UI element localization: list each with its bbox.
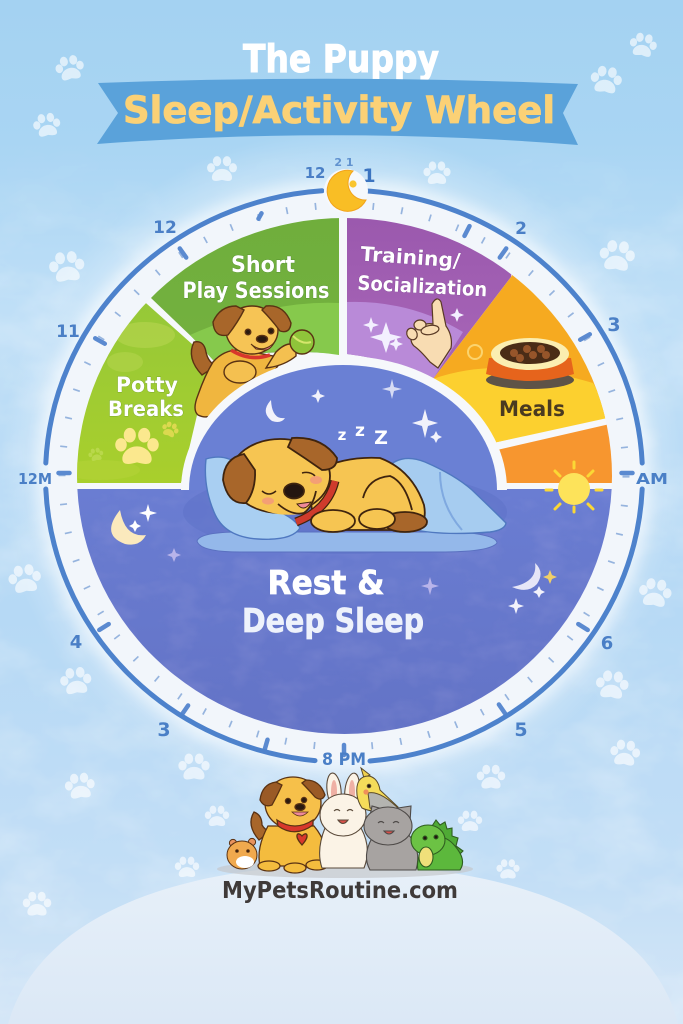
section label: Rest and Deep Sleep: Rest & bbox=[268, 563, 384, 602]
icon: sun bbox=[546, 462, 602, 512]
pet: cockatiel bbox=[357, 768, 400, 812]
pet: cat bbox=[364, 806, 418, 870]
hour labels: 6 bbox=[601, 633, 613, 654]
hour labels: 4 bbox=[70, 632, 82, 653]
title line: The Puppy: The Puppy bbox=[243, 37, 439, 81]
hour labels: 5 bbox=[514, 719, 528, 741]
section label: Potty Breaks: Breaks bbox=[108, 397, 184, 421]
wheel face sectors bbox=[77, 218, 612, 734]
sector: training and socialization bbox=[347, 210, 520, 379]
section label: Training / Socialization: Training/ bbox=[360, 242, 462, 273]
ground shadow bbox=[217, 860, 473, 878]
wheel rim bbox=[36, 180, 652, 772]
section label: Training / Socialization bbox=[357, 242, 488, 301]
illustration: sleeping puppy bbox=[183, 438, 507, 554]
section label: Potty Breaks: Potty bbox=[116, 373, 178, 397]
hour labels: 1 bbox=[362, 165, 376, 187]
section label: Short Play Sessions bbox=[182, 253, 330, 304]
section label: Potty Breaks bbox=[108, 373, 184, 421]
section label: Short Play Sessions: Short bbox=[231, 253, 295, 278]
title line: Sleep/Activity Wheel: Sleep/Activity Wheel bbox=[123, 89, 555, 132]
icon: pointing hand bbox=[405, 299, 451, 368]
icon: food bowl bbox=[486, 338, 574, 389]
icon: paw bbox=[115, 428, 159, 464]
pet: rabbit bbox=[320, 772, 367, 868]
sleep Zs: z bbox=[355, 421, 365, 441]
hour labels: AM bbox=[636, 470, 668, 488]
hour labels: 12 bbox=[305, 164, 325, 182]
banner ribbon bbox=[97, 79, 578, 145]
sparkles: training bbox=[363, 308, 464, 353]
site name: MyPetsRoutine.com bbox=[222, 878, 458, 904]
pet: hamster bbox=[227, 838, 257, 869]
section label: Rest and Deep Sleep bbox=[242, 563, 424, 640]
wheel bbox=[18, 156, 668, 772]
hour labels: 2 1 bbox=[334, 156, 354, 169]
night decorations bbox=[111, 504, 557, 614]
pet: iguana bbox=[411, 820, 463, 870]
title bbox=[97, 37, 578, 145]
section label: Rest and Deep Sleep: Deep Sleep bbox=[242, 601, 424, 640]
puppy bbox=[223, 438, 427, 532]
hour labels: 3 bbox=[607, 314, 621, 336]
sector: rest and deep sleep bbox=[70, 489, 620, 739]
sleep Zs: Z bbox=[374, 427, 388, 449]
sleep Zs bbox=[338, 421, 388, 449]
hour labels bbox=[18, 156, 668, 770]
hour labels: 2 bbox=[515, 219, 527, 239]
section label: Training / Socialization: Socialization bbox=[357, 271, 488, 301]
hour labels: 11 bbox=[56, 322, 80, 342]
shadow halo bbox=[183, 470, 507, 554]
pet: puppy bbox=[251, 777, 328, 873]
sleep Zs: z bbox=[338, 426, 347, 444]
hour labels: 8 PM bbox=[322, 750, 366, 770]
sector: afternoon orange bbox=[499, 424, 612, 483]
hub moon and stars bbox=[266, 379, 442, 443]
sector: short play sessions bbox=[151, 218, 339, 360]
blanket bbox=[385, 458, 506, 533]
sector: potty breaks bbox=[77, 303, 210, 483]
hour labels: 12M bbox=[18, 470, 52, 488]
section label: Meals: Meals bbox=[499, 397, 565, 421]
hour labels: 3 bbox=[157, 719, 171, 741]
bed mat bbox=[197, 532, 497, 552]
background hill bbox=[8, 865, 678, 1024]
icon: playing puppy bbox=[191, 306, 314, 417]
hour labels: 12 bbox=[153, 218, 177, 238]
section label: Short Play Sessions: Play Sessions bbox=[182, 279, 330, 304]
sector: meals bbox=[434, 275, 606, 442]
pillow bbox=[205, 457, 300, 539]
central hub bbox=[181, 356, 507, 490]
footer pets logo bbox=[217, 768, 473, 904]
icon: crescent moon top marker bbox=[324, 169, 368, 213]
